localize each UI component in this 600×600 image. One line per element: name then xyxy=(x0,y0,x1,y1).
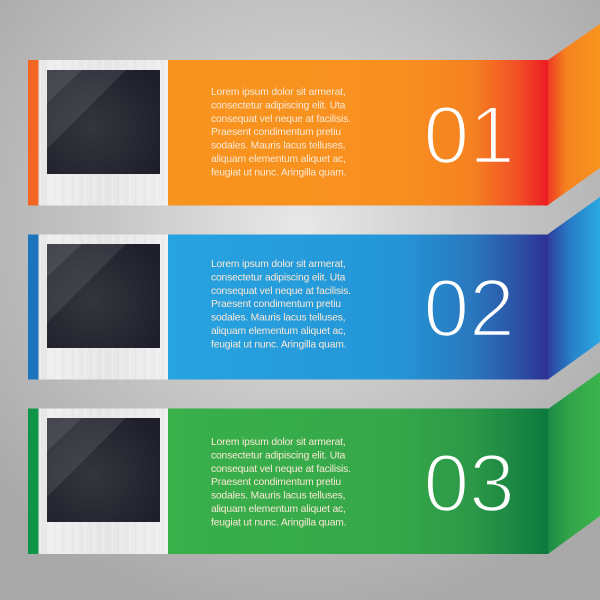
band: green xyxy=(168,408,548,554)
text block 3: Praesent condimentum pretiu xyxy=(211,477,341,488)
fold: green xyxy=(548,372,600,554)
band: orange xyxy=(168,60,548,206)
text block 2: aliquam elementum aliquet ac, xyxy=(211,326,346,337)
number 03: 03 xyxy=(424,438,515,529)
text block 3: consequat vel neque at facilisis. xyxy=(211,464,351,475)
text block 3: aliquam elementum aliquet ac, xyxy=(211,504,346,515)
text block 1: consectetur adipiscing elit. Uta xyxy=(211,100,346,111)
accent strip: green xyxy=(28,408,38,554)
text block 1: sodales. Mauris lacus telluses, xyxy=(211,141,345,152)
fold: orange xyxy=(548,24,600,205)
text block 3: sodales. Mauris lacus telluses, xyxy=(211,491,345,502)
accent strip: blue xyxy=(28,234,38,380)
text block 2: Lorem ipsum dolor sit armerat, xyxy=(211,259,346,270)
text block 2: feugiat ut nunc. Aringilla quam. xyxy=(211,339,346,350)
number 02: 02 xyxy=(424,263,515,354)
band: blue xyxy=(168,234,548,380)
text block 1: Lorem ipsum dolor sit armerat, xyxy=(211,87,346,98)
icon: photo frame 3 xyxy=(38,408,168,554)
icon: photo frame 1 xyxy=(38,60,168,206)
text block 2: consectetur adipiscing elit. Uta xyxy=(211,272,346,283)
text block 1: Praesent condimentum pretiu xyxy=(211,127,341,138)
text block 3: consectetur adipiscing elit. Uta xyxy=(211,450,346,461)
text block 3: Lorem ipsum dolor sit armerat, xyxy=(211,437,346,448)
text block 1: consequat vel neque at facilisis. xyxy=(211,114,351,125)
accent strip: orange xyxy=(28,60,38,206)
panel: banner 03 xyxy=(28,372,600,554)
text block 2: consequat vel neque at facilisis. xyxy=(211,286,351,297)
icon: photo frame 2 xyxy=(38,234,168,380)
panel: banner 01 xyxy=(28,24,600,206)
number 01: 01 xyxy=(424,90,515,181)
text block 2: Praesent condimentum pretiu xyxy=(211,299,341,310)
text block 1: feugiat ut nunc. Aringilla quam. xyxy=(211,167,346,178)
text block 2: sodales. Mauris lacus telluses, xyxy=(211,313,345,324)
fold: blue xyxy=(548,197,600,380)
text block 1: aliquam elementum aliquet ac, xyxy=(211,154,346,165)
text block 3: feugiat ut nunc. Aringilla quam. xyxy=(211,517,346,528)
panel: banner 02 xyxy=(28,197,600,380)
